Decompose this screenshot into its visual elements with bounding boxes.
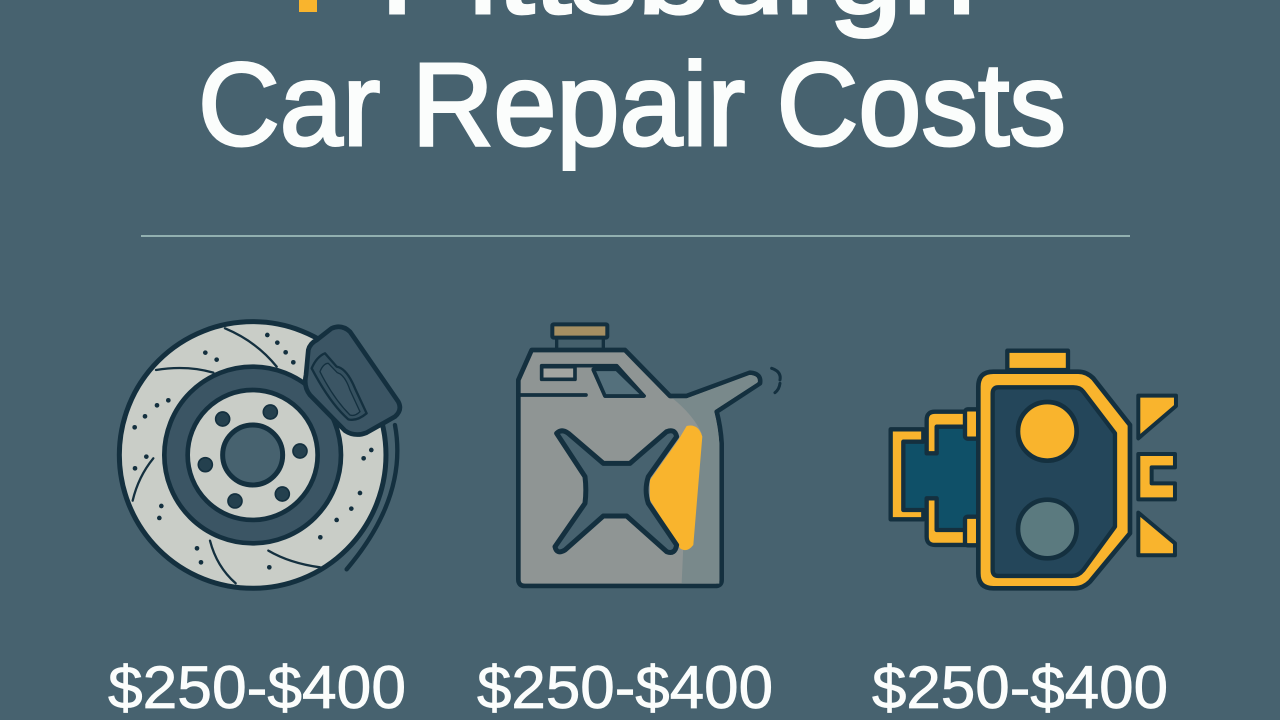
title accent mark bbox=[299, 0, 317, 12]
price: brake repair: $250-$400 bbox=[108, 654, 406, 720]
icon: brake disc bbox=[119, 322, 400, 588]
title bbox=[198, 0, 1066, 171]
icon: check engine bbox=[891, 351, 1176, 588]
price: oil change: $250-$400 bbox=[477, 654, 773, 720]
price: check engine: $250-$400 bbox=[872, 654, 1168, 720]
icon: fuel jerry can bbox=[518, 324, 780, 586]
title line 2: Car Repair Costs bbox=[198, 39, 1066, 171]
